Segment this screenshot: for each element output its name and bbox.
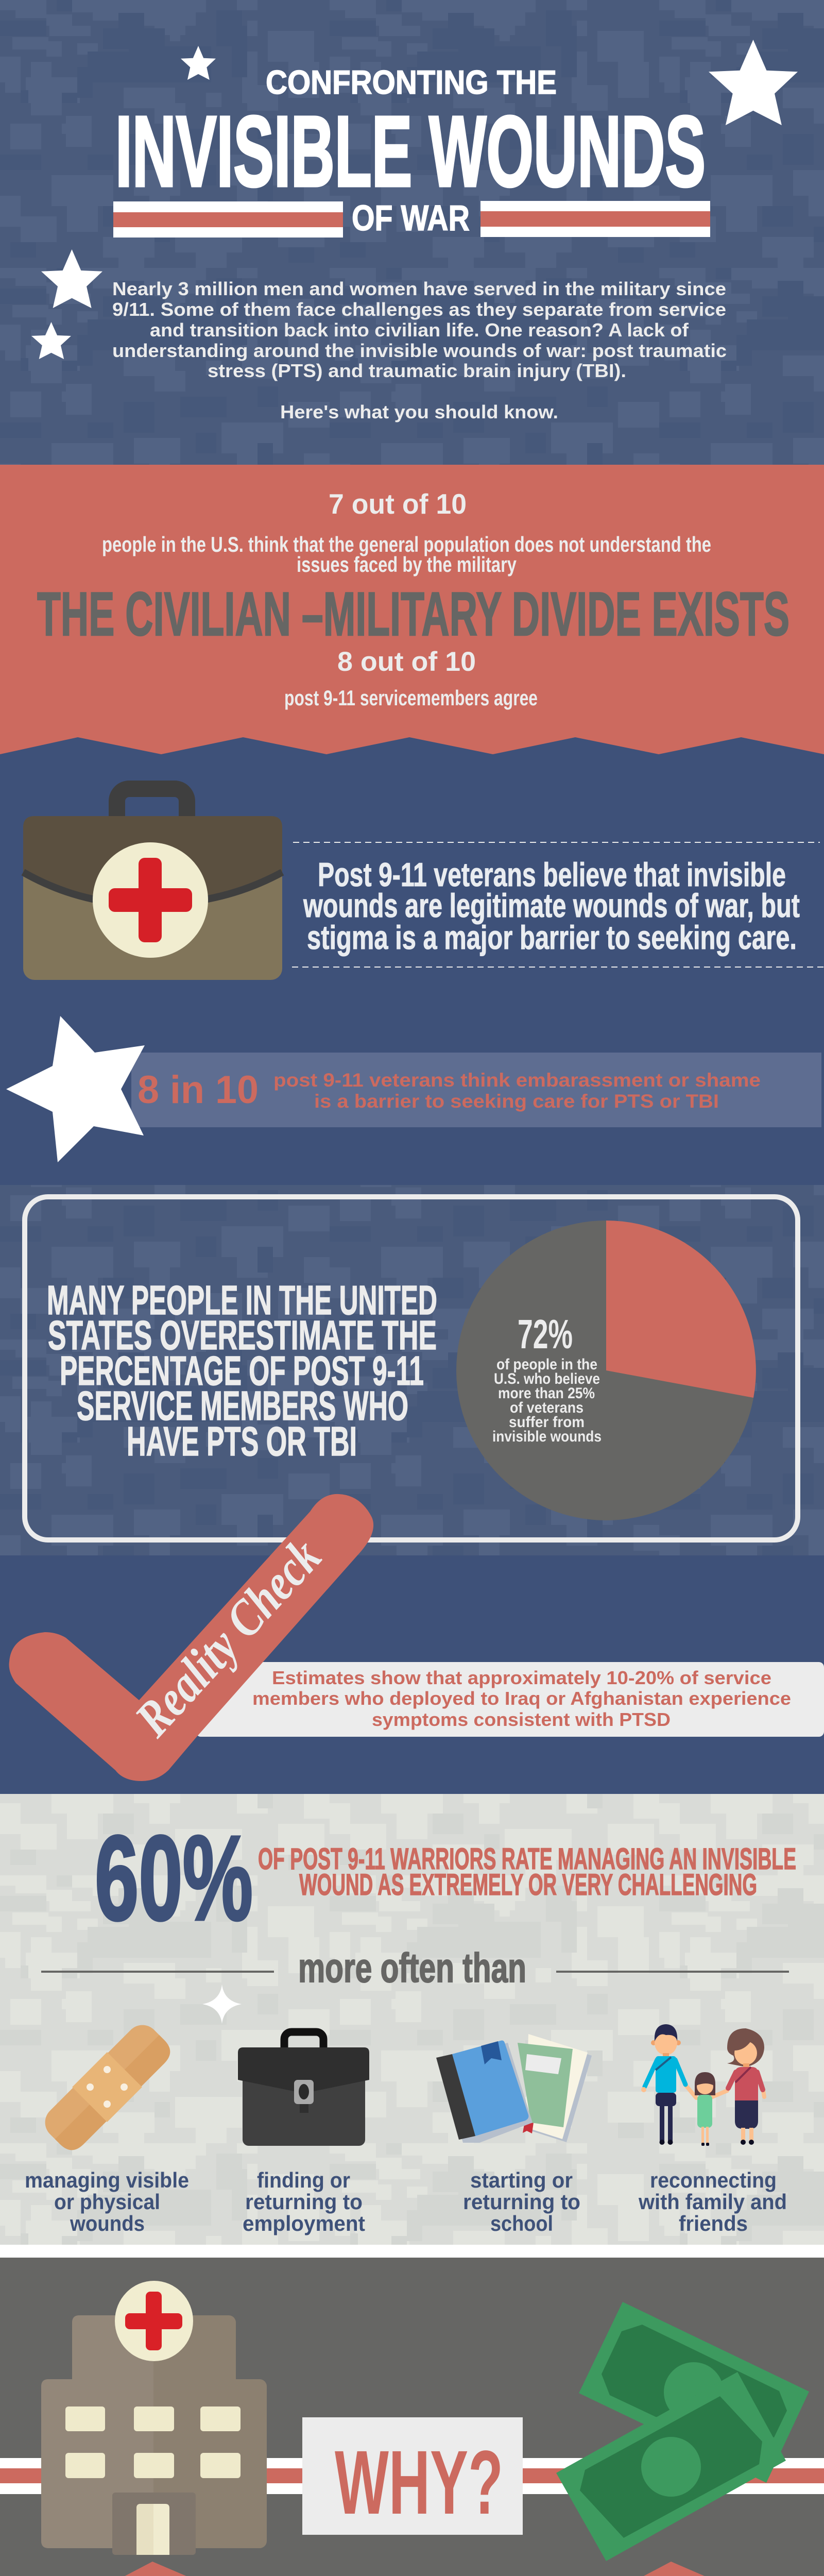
pie chart: U.S. who believe [494,1370,600,1387]
label: visible wounds: or physical [54,2190,160,2214]
icon: briefcase [238,2032,369,2146]
check label: Reality Check [124,1528,332,1748]
label: family: friends [679,2211,748,2235]
heading: MANY PEOPLE IN THE UNITED [47,1277,437,1323]
why heading: WHY? [335,2432,503,2533]
callout text: members who deployed to Iraq or Afghanistan experience [252,1688,791,1709]
icon: star left small [31,322,71,359]
pie chart: suffer from [509,1414,585,1431]
stat: 60%: 60% [95,1810,253,1945]
label: visible wounds [25,2168,189,2235]
why box [302,2417,523,2535]
icon: large star [6,1016,145,1162]
panel: why [0,2258,824,2576]
icon: family [641,2024,764,2146]
intro text: Nearly 3 million men and women have served in the military since [112,278,726,299]
icon: bandage [38,2018,177,2157]
icon: star large top right [709,40,798,125]
intro text: understanding around the invisible wounds of war: post traumatic [112,340,727,361]
panel: overestimate [0,1185,824,1555]
panel: reality check [0,1494,824,1794]
label: employment: employment [243,2211,365,2235]
stat: 8 in 10: 8 in 10 [138,1068,259,1112]
label: school: school [490,2211,553,2235]
intro text: and transition back into civilian life. One reason? A lack of [150,319,689,341]
heading: SERVICE MEMBERS WHO [77,1383,408,1429]
banner text: is a barrier to seeking care for PTS or TBI [314,1091,719,1112]
arrows: finding care [98,2562,211,2576]
stat description: issues faced by the military [297,552,517,577]
heading: PERCENTAGE OF POST 9-11 [60,1348,424,1394]
label: employment: returning to [245,2190,363,2214]
callout text: Estimates show that approximately 10-20% of service [272,1667,771,1688]
icon: medical kit [23,789,282,980]
dashed rules [292,842,824,967]
callout text [252,1667,791,1730]
callout box [196,1662,824,1737]
banner text [273,1070,761,1112]
stat: 7 out of 10: 7 out of 10 [329,488,467,520]
icon: hospital [41,2281,267,2555]
label: family [638,2168,787,2235]
heading: HAVE PTS OR TBI [127,1418,357,1464]
panel: civilian-military divide [0,465,824,754]
pie chart: 72% [518,1311,573,1357]
label: school: returning to [463,2190,580,2214]
panel: stigma [23,789,824,980]
intro text: Here's what you should know. [280,401,558,422]
label: employment: finding or [257,2168,350,2192]
pie chart: more than 25% [498,1385,595,1402]
label: family: with family and [638,2190,787,2214]
pie chart [456,1221,756,1520]
pie chart: of people in the [496,1356,597,1373]
icon: check mark [9,1494,373,1781]
arrows: affording care [617,2562,729,2576]
subheading: more often than [298,1945,526,1991]
title [115,63,706,238]
title stripes [113,201,710,238]
panel: 8 in 10 [6,1016,821,1162]
label: school: starting or [470,2168,573,2192]
pie chart: of veterans [510,1399,583,1416]
intro text: 9/11. Some of them face challenges as they separate from service [112,299,726,320]
statement text [303,856,800,956]
callout text: symptoms consistent with PTSD [372,1709,671,1730]
icon: money [556,2302,809,2561]
banner [131,1053,821,1127]
panel: 60 percent [0,1794,824,2245]
label: school [463,2168,580,2235]
intro text: stress (PTS) and traumatic brain injury (TBI). [208,360,626,381]
label: visible wounds: managing visible [25,2168,189,2192]
pie chart: invisible wounds [492,1428,602,1445]
label: family: reconnecting [650,2168,777,2192]
banner text: post 9-11 veterans think embarassment or shame [273,1070,761,1091]
stripes [0,2458,824,2494]
heading: STATES OVERESTIMATE THE [48,1312,437,1358]
title: CONFRONTING THE [266,63,557,101]
panel: navy section background [0,721,824,1185]
rounded frame [25,1197,798,1540]
panel: header [0,0,824,465]
icon: sparkle [202,1985,242,2024]
intro text [112,278,727,422]
label: employment [243,2168,365,2235]
label: visible wounds: wounds [70,2211,145,2235]
title: OF WAR [352,198,470,238]
icon: star left [41,249,102,308]
icon: star small top [181,46,216,80]
stat: 8 out of 10: 8 out of 10 [337,647,476,677]
stat heading [258,1842,796,1902]
stat description 2: post 9-11 servicemembers agree [284,686,538,710]
heading [47,1277,437,1464]
stat description [102,532,711,577]
icon: books [436,2034,592,2143]
